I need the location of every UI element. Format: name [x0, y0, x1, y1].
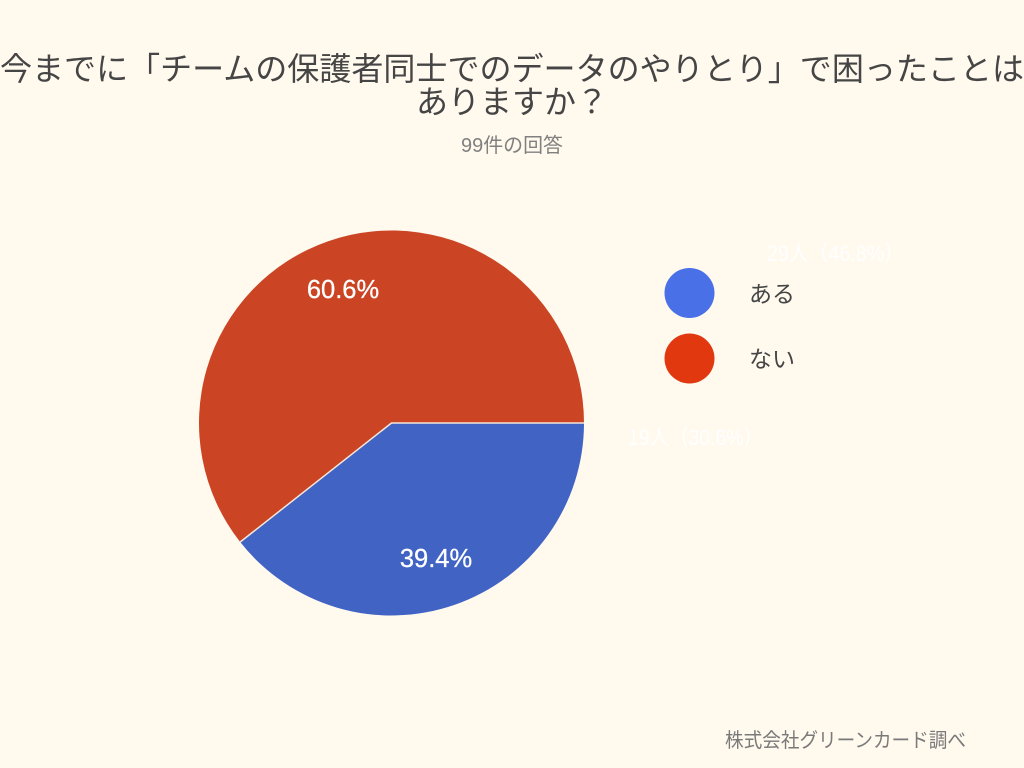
source note: 株式会社グリーンカード調べ	[725, 729, 966, 752]
legend item: ある: ある	[749, 281, 795, 307]
title	[0, 51, 1024, 120]
legend item: ない: ない	[749, 346, 795, 372]
faint annotation: 29人: 29人（46.8%）	[767, 241, 904, 266]
title: ありますか？	[416, 84, 608, 120]
title: 今までに「チームの保護者同士でのデータのやりとり」で困ったことは	[0, 51, 1024, 87]
legend	[664, 268, 795, 384]
slice: ない 60.6%	[199, 230, 584, 542]
slice: ある 39.4%	[240, 423, 584, 615]
slice divider	[240, 423, 584, 542]
pie chart	[199, 230, 584, 615]
subtitle: response count: 99件の回答	[461, 134, 563, 157]
label: 39.4%: 39.4%	[400, 545, 472, 573]
faint annotation: 19人: 19人（30.6%）	[628, 425, 763, 450]
label: 60.6%: 60.6%	[307, 276, 379, 304]
